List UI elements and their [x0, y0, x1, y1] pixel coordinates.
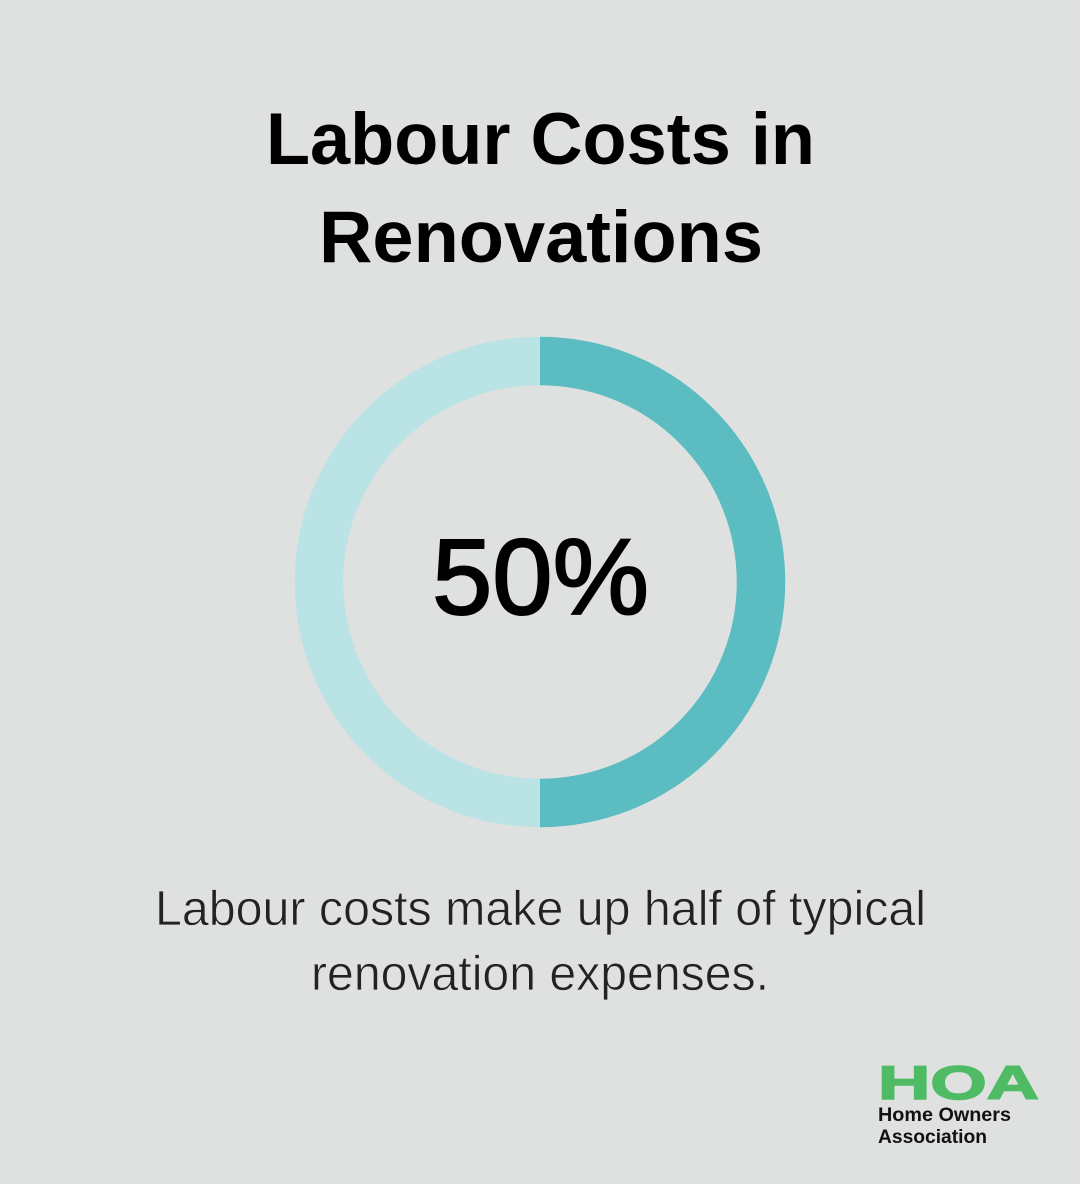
logo letters HOA: HOA — [878, 1056, 1039, 1109]
percentage value: 50% — [432, 516, 649, 637]
logo wordmark: Home Owners — [878, 1105, 1011, 1126]
title: Renovations — [319, 197, 763, 278]
logo wordmark — [878, 1105, 1011, 1148]
description text: renovation expenses. — [311, 947, 769, 1001]
remaining share arc — [319, 361, 540, 803]
logo: Home Owners Association — [878, 1056, 1039, 1148]
donut chart: 50% — [319, 361, 761, 803]
labour share arc — [540, 361, 761, 803]
description text: Labour costs make up half of typical — [155, 882, 926, 936]
title — [266, 99, 815, 278]
logo wordmark: Association — [878, 1127, 987, 1148]
title: Labour Costs in — [266, 99, 815, 180]
description text — [155, 882, 926, 1001]
